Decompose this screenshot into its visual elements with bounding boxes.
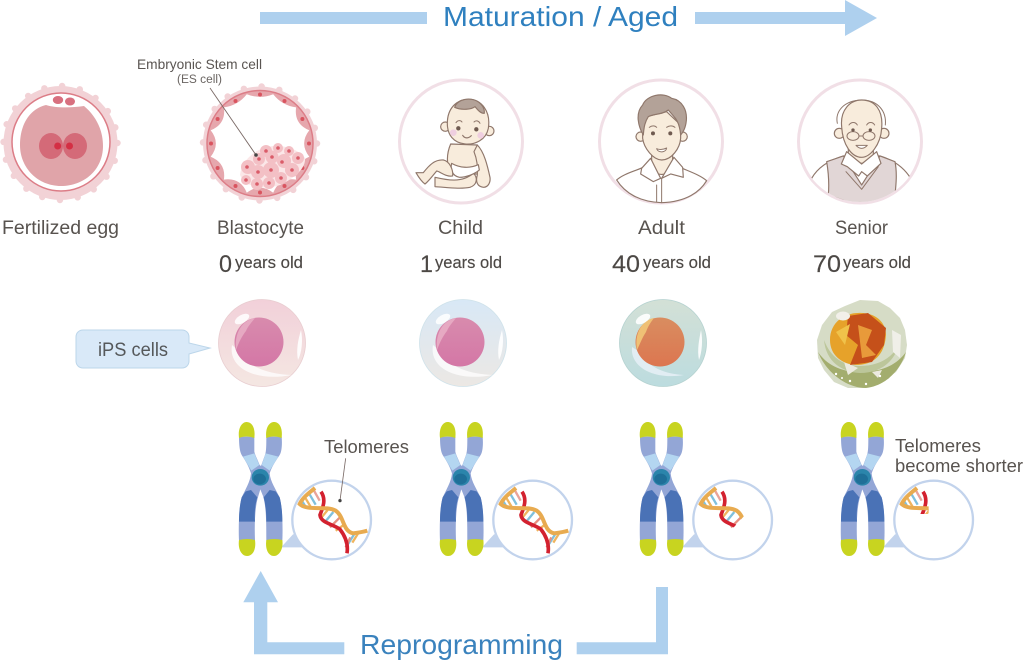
label: Child: Child: [438, 217, 483, 239]
chromosome and lens: adult stage: [640, 422, 772, 559]
age: 40 years old: years old: [643, 254, 711, 272]
label: Embryonic Stem cell: Embryonic Stem cell: [137, 57, 262, 72]
cell: blastocyte iPS cell: [218, 300, 306, 386]
chromosome and lens: child stage: [440, 422, 572, 559]
label: Fertilized egg: Fertilized egg: [2, 217, 119, 239]
chromosome and lens: senior stage: [841, 422, 973, 559]
callout: iPS cells: [76, 330, 210, 368]
label: Telomeres become shorter: [895, 435, 1023, 476]
chromosome and lens: blastocyte stage: [239, 422, 371, 559]
label: Telomeres: Telomeres: [324, 436, 409, 457]
cell: child cell: [420, 300, 506, 386]
arrow: maturation direction: [260, 0, 877, 36]
cell: adult cell: [620, 300, 706, 386]
age: 0 years old: years old: [235, 254, 303, 272]
portrait: adult: [600, 80, 722, 203]
label: Senior: Senior: [835, 217, 888, 239]
portrait: senior: [798, 80, 922, 207]
age: 1 years old: 1: [420, 251, 433, 278]
telomere pointer: [338, 458, 346, 502]
callout: iPS cells: iPS cells: [98, 340, 168, 361]
label: Telomeres become shorter: Telomeres: [895, 435, 981, 456]
age: 1 years old: [420, 251, 502, 278]
label: Blastocyte: Blastocyte: [217, 217, 304, 239]
leader line: [210, 88, 256, 155]
title: Maturation / Aged: Maturation / Aged: [443, 1, 678, 32]
portrait: child: [400, 80, 522, 203]
magnifier lens: [281, 481, 371, 559]
blastocyst cavity: [211, 94, 309, 193]
arrow: reprogramming return: [243, 571, 668, 654]
label: Adult: Adult: [638, 217, 686, 239]
label: ES cell: (ES cell): [177, 74, 222, 86]
age: 0 years old: [219, 251, 303, 278]
icon: blastocyte with stem cell mass: [203, 86, 317, 200]
age: 70 years old: years old: [843, 254, 911, 272]
lining cell nuclei: [209, 92, 311, 194]
label: Telomeres become shorter: become shorter: [895, 455, 1023, 476]
age: 40 years old: [612, 251, 711, 278]
cell: senior damaged cell: [817, 300, 907, 388]
label: Reprogramming: Reprogramming: [360, 629, 563, 660]
age: 40 years old: 40: [612, 251, 640, 278]
age: 1 years old: years old: [435, 254, 502, 272]
age: 70 years old: [813, 251, 911, 278]
age: 0 years old: 0: [219, 251, 232, 278]
icon: fertilized egg: [4, 86, 118, 200]
age: 70 years old: 70: [813, 251, 841, 278]
stem cell mass: [240, 143, 305, 190]
